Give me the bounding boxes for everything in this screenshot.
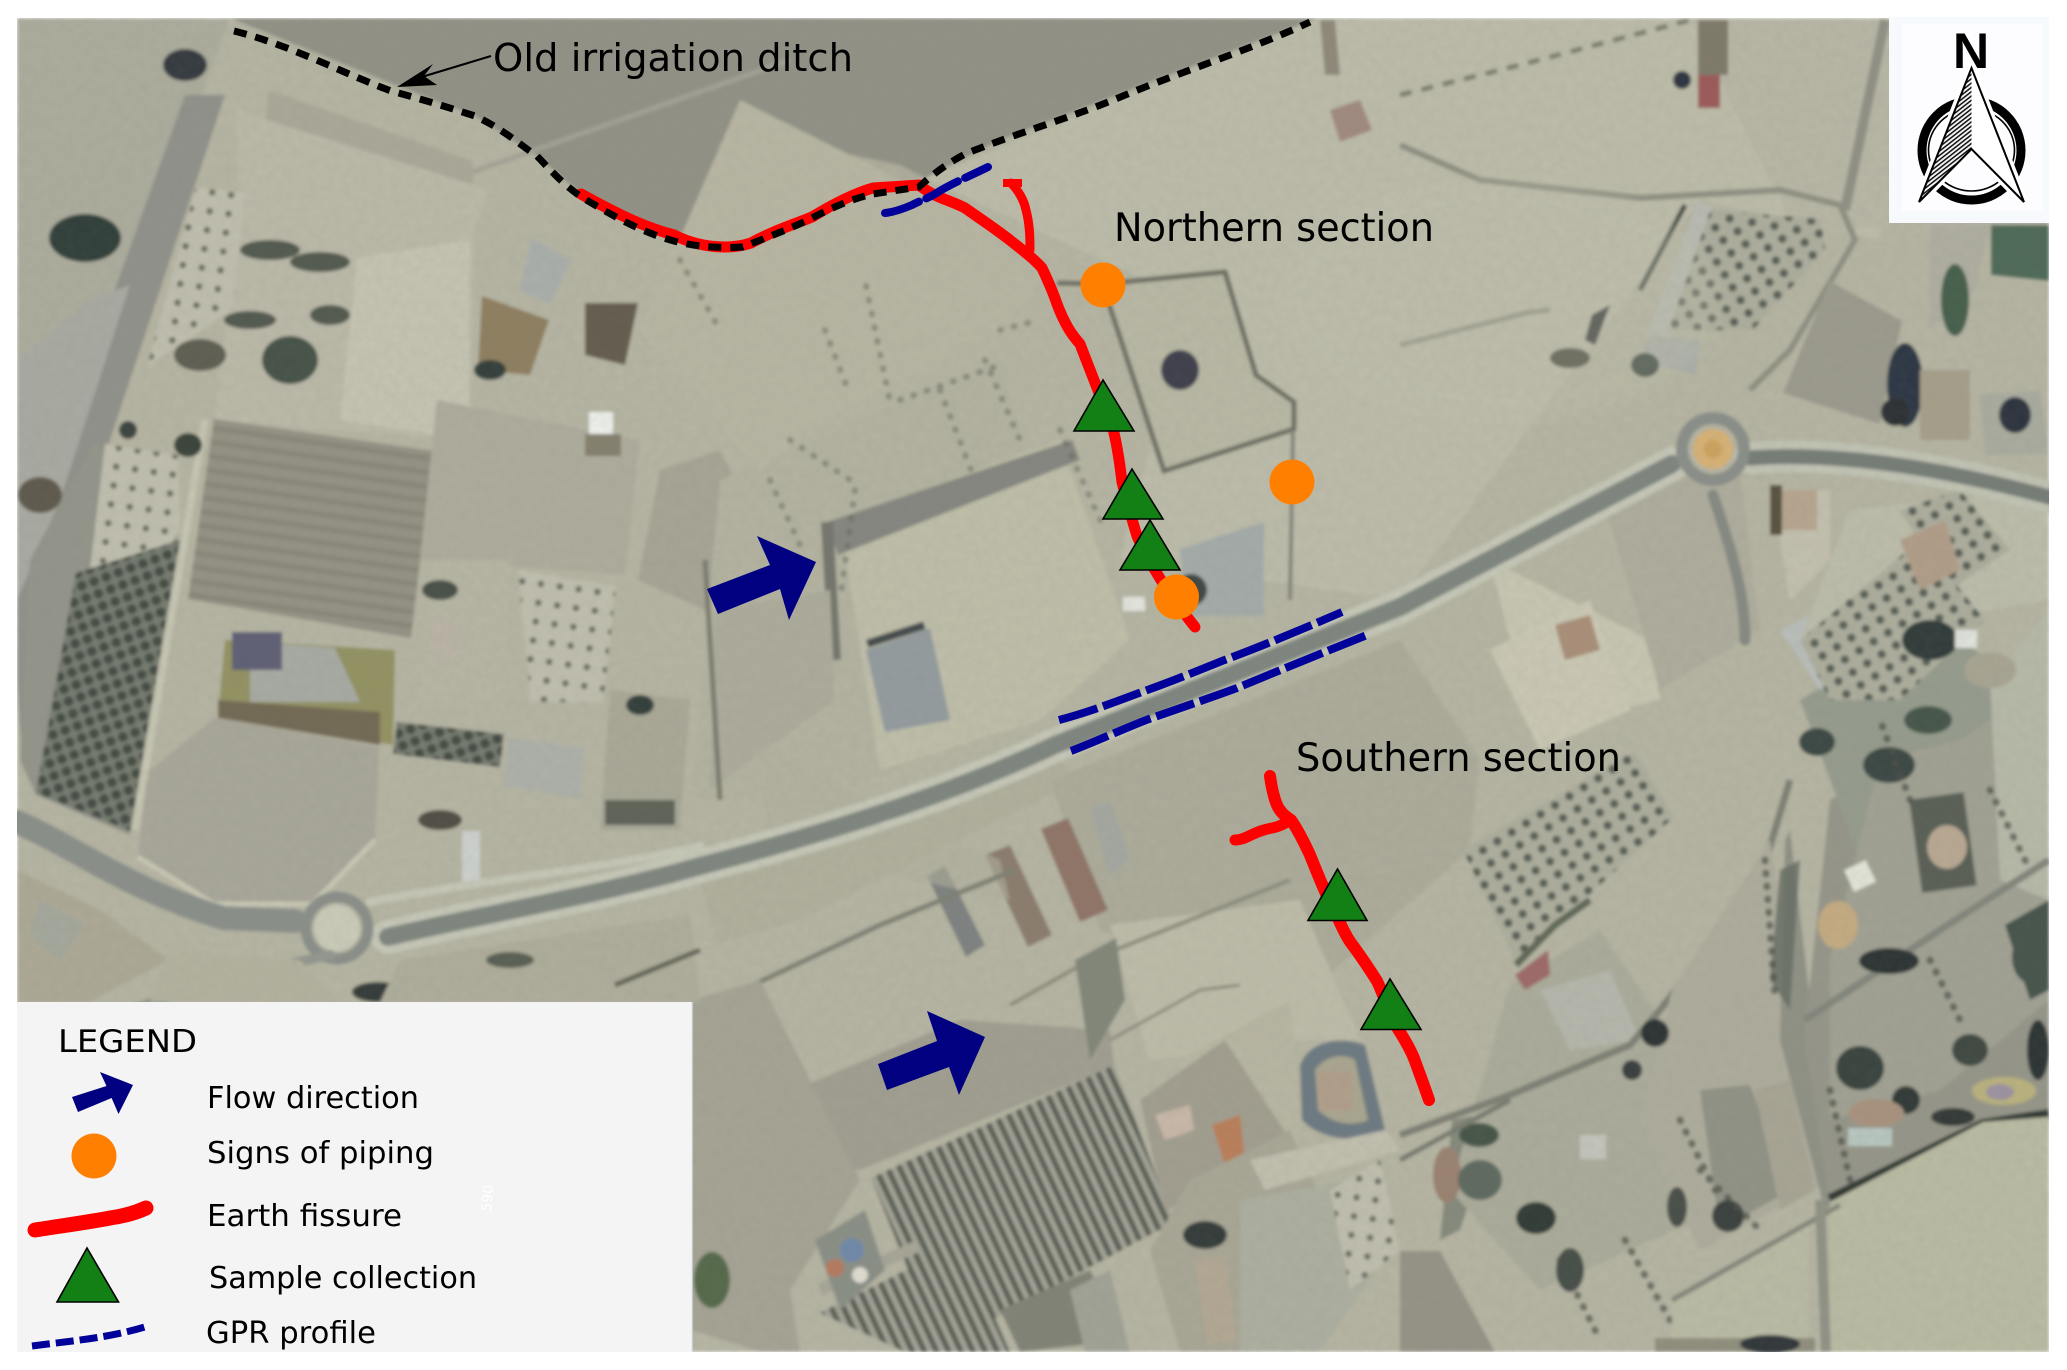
farm strip south of road xyxy=(700,760,1080,960)
moated compound xyxy=(1300,1041,1385,1139)
east orchard and village xyxy=(1463,751,1674,962)
north-east pale fields xyxy=(925,18,1880,600)
label: southern section: Southern section xyxy=(1296,736,1621,781)
village buildings and trees xyxy=(1433,706,2049,1292)
west track and fields xyxy=(17,95,225,760)
legend item: earth fissure xyxy=(35,1199,402,1234)
GPR profile road lower xyxy=(1071,635,1367,751)
earth fissure southern section xyxy=(1235,776,1429,1100)
piping sign north 1 xyxy=(1080,262,1126,308)
vineyard xyxy=(820,1065,1174,1352)
legend item: signs of piping xyxy=(72,1134,434,1178)
sample triangle north 3 xyxy=(1120,520,1180,570)
legend panel xyxy=(17,1002,692,1352)
legend item: earth fissure: Earth fissure xyxy=(207,1199,402,1234)
label: old irrigation ditch: Old irrigation ditch xyxy=(493,36,853,80)
south-east pale fields xyxy=(1828,1114,2049,1208)
legend item: sample collection: Sample collection xyxy=(209,1261,477,1296)
legend item: GPR profile xyxy=(32,1316,376,1351)
main road with roundabouts xyxy=(17,418,2049,1010)
legend panel: 590 xyxy=(479,1184,497,1212)
label: northern section: Northern section xyxy=(1114,206,1434,251)
pond compound xyxy=(218,640,395,745)
village tree rows xyxy=(1560,720,2030,1340)
old irrigation ditch dashed line xyxy=(234,22,1310,247)
flow direction arrow south xyxy=(878,1011,985,1095)
mid-east plots south of road xyxy=(1490,560,1660,730)
legend item: signs of piping: Signs of piping xyxy=(207,1136,434,1171)
flow direction arrow north xyxy=(707,536,816,620)
soft tonal variation xyxy=(1280,180,1720,420)
piping sign north 2 xyxy=(1270,460,1314,504)
compass rose xyxy=(1919,68,2024,202)
sample triangle north 1 xyxy=(1074,380,1134,431)
legend item: flow direction xyxy=(72,1072,419,1116)
piping sign north 3 xyxy=(1154,574,1199,620)
sample triangle south 1 xyxy=(1308,869,1367,920)
north letter: N xyxy=(1953,23,1989,79)
dark ploughed field north of ditch xyxy=(230,18,1318,245)
tree clusters west xyxy=(163,49,207,81)
legend item: sample collection xyxy=(57,1248,477,1302)
orchards and sheds mid-west xyxy=(518,570,616,702)
GPR profile road upper xyxy=(1059,612,1342,720)
south-west corner xyxy=(17,870,170,1002)
legend item: flow direction: Flow direction xyxy=(207,1081,419,1116)
north-east orchard and buildings xyxy=(1664,210,1825,330)
north arrow panel xyxy=(1889,17,2049,223)
south-central properties xyxy=(692,980,860,1352)
sample triangle north 2 xyxy=(1103,469,1163,519)
GPR profile north xyxy=(885,167,988,213)
legend title: LEGEND xyxy=(58,1024,197,1060)
ditch callout arrow xyxy=(397,56,491,87)
earth fissure northern section xyxy=(581,183,1195,627)
tree rows in central plots xyxy=(680,260,1100,600)
central plots xyxy=(710,476,744,588)
sample triangle south 2 xyxy=(1361,979,1421,1030)
legend item: GPR profile: GPR profile xyxy=(206,1316,376,1351)
